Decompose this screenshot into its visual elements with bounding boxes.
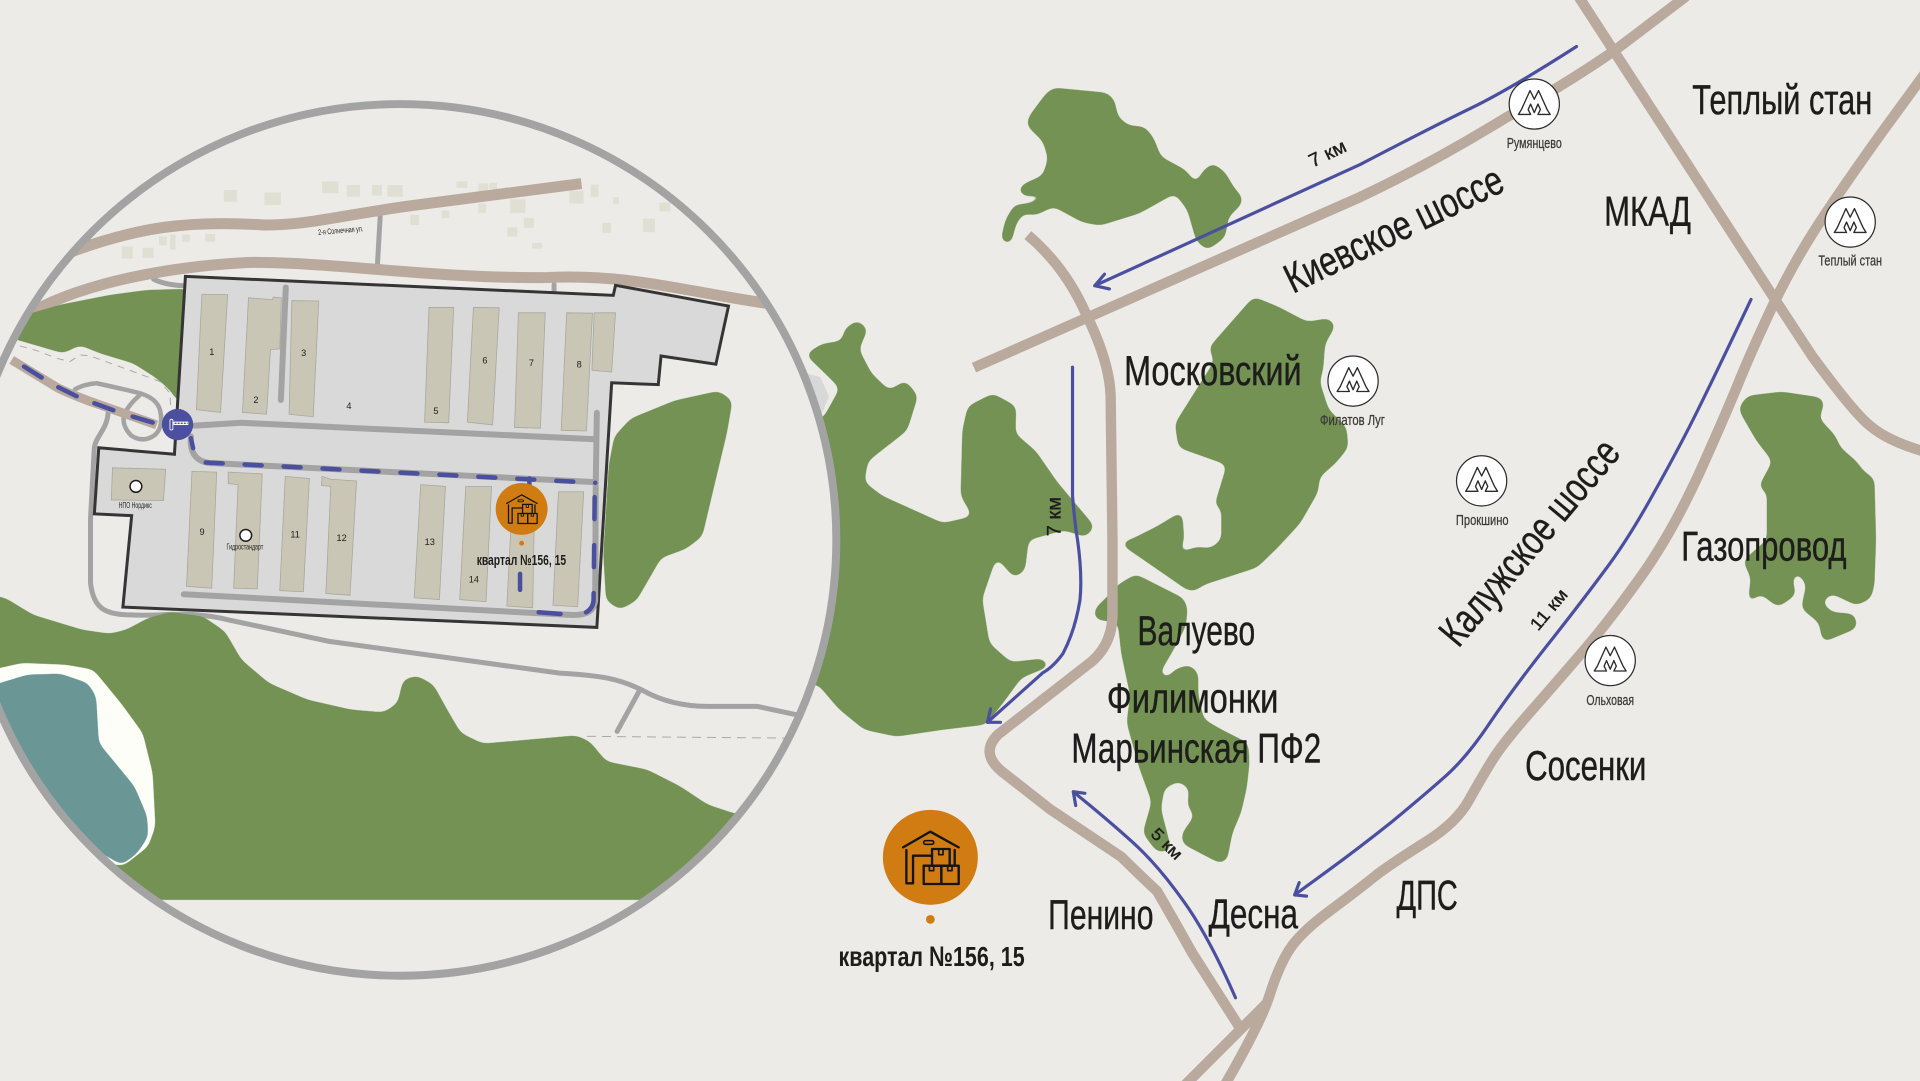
forest: inset east <box>603 391 732 610</box>
forest: big west patch <box>771 320 1095 737</box>
routes <box>987 47 1751 998</box>
inset lens map <box>0 178 832 900</box>
building number labels: 13 <box>425 537 435 547</box>
path: dashed trail <box>20 346 171 410</box>
inset warehouse pin <box>477 483 566 569</box>
small houses <box>122 181 670 259</box>
building number labels: 3 <box>301 348 306 358</box>
building number labels: 9 <box>199 527 205 537</box>
metro: Filatov Lug: Филатов Луг <box>1320 413 1385 429</box>
tenant marker: Gidrostandart: Гидростандарт <box>227 543 264 552</box>
building number labels: 12 <box>337 533 347 543</box>
route: dashed inside site <box>206 462 595 483</box>
pin circle <box>883 810 978 905</box>
gate marker <box>162 409 193 440</box>
building number labels: 1 <box>209 347 214 357</box>
forest: Gazoprovod patch <box>1739 392 1876 642</box>
label: Penino: Пенино <box>1048 891 1153 938</box>
road: grey perimeter road <box>91 413 801 716</box>
road: dashed path south <box>587 736 790 738</box>
metro: Rumyantsevo <box>1507 79 1562 152</box>
metro: Teply Stan <box>1818 197 1882 270</box>
forest: Valuevo patch <box>1095 574 1249 863</box>
pond water <box>0 674 148 865</box>
street label: 2-я Солнечная ул. <box>318 224 364 237</box>
route arrow: 11 km <box>1295 299 1751 896</box>
forest: Moskovsky patch <box>1120 297 1348 591</box>
label: Valuevo: Валуево <box>1138 607 1255 654</box>
inset warehouse pin: квартал №156, 15 <box>477 553 566 569</box>
road: grey connector <box>154 217 554 294</box>
road: Kaluga highway <box>1226 73 1920 1081</box>
road: junction ramp <box>1185 1004 1266 1081</box>
route: dashed east side <box>536 494 597 616</box>
label: DPS: ДПС <box>1397 872 1458 919</box>
distance: 7 km west: 7 км <box>1044 497 1065 536</box>
industrial site <box>94 276 729 627</box>
site lanes <box>184 287 597 615</box>
building number labels: 5 <box>433 406 438 416</box>
label: Moskovsky: Московский <box>1124 347 1302 394</box>
label: Kaluga highway: Калужское шоссе <box>1429 429 1629 655</box>
building number labels: 11 <box>290 529 300 539</box>
inset roads <box>16 184 801 738</box>
building number labels: 2 <box>253 395 258 405</box>
metro: Olkhovaya <box>1585 636 1635 709</box>
roads: main map <box>974 0 1920 1081</box>
building number labels: 4 <box>346 401 352 411</box>
building number labels: 7 <box>529 358 534 368</box>
grey patch beside lens <box>802 372 829 424</box>
warehouse pin <box>839 810 1025 972</box>
pin label: квартал №156, 15 <box>839 941 1025 972</box>
forest: inset bottom <box>0 596 735 900</box>
route arrow: west 7 km <box>987 367 1081 722</box>
icon: warehouse <box>903 832 959 884</box>
route: entry segment <box>191 438 529 590</box>
route arrow: Kiev 7 km <box>1095 47 1577 289</box>
label: Sosenki: Сосенки <box>1525 742 1646 789</box>
lens disc <box>771 384 832 685</box>
metro: Olkhovaya: Ольховая <box>1586 693 1634 709</box>
road: Kiev highway <box>974 0 1686 368</box>
building number labels <box>199 347 582 585</box>
metro: Teply Stan: Теплый стан <box>1818 254 1882 270</box>
route: dashed approach <box>24 367 153 423</box>
label: Desna: Десна <box>1209 890 1299 937</box>
road: approach loop <box>75 383 161 439</box>
distance: 7 km Kiev: 7 км <box>1306 136 1350 172</box>
label: Marinskaya PF2: Марьинская ПФ2 <box>1071 724 1321 771</box>
forest: north patch <box>1001 88 1243 250</box>
route arrow: 5 km <box>1073 792 1236 998</box>
metro: Prokshino: Прокшино <box>1456 513 1509 529</box>
building number labels: 6 <box>482 356 487 366</box>
road: grey branch <box>617 691 639 731</box>
building number labels: 8 <box>577 359 582 369</box>
metro: Prokshino <box>1456 456 1509 529</box>
road: MKAD <box>1578 0 1920 452</box>
road: upper beige road <box>16 262 768 322</box>
label: Kiev highway: Киевское шоссе <box>1276 156 1511 302</box>
site boundary <box>94 276 729 627</box>
label: Filimonki: Филимонки <box>1107 675 1278 722</box>
road: beige approach <box>12 360 157 425</box>
distance: 11 km: 11 км <box>1526 585 1572 634</box>
approach road and loop <box>12 346 171 439</box>
forest: inset north-west <box>18 288 184 398</box>
buildings <box>111 294 615 608</box>
label: MKAD: МКАД <box>1604 187 1691 234</box>
tenant marker: NPO Nordiks: НПО Нордикс <box>119 501 152 510</box>
distance: 5 km: 5 км <box>1147 824 1187 864</box>
forest: main area patches <box>771 88 1876 863</box>
road: west road <box>990 235 1241 1030</box>
label: Gazoprovod: Газопровод <box>1681 523 1847 570</box>
pond bank <box>0 663 155 866</box>
pin dot <box>926 915 935 924</box>
road: Solnechnaya street <box>60 184 581 256</box>
metro: Rumyantsevo: Румянцево <box>1507 136 1562 152</box>
tenant marker: NPO Nordiks <box>119 481 152 510</box>
building number labels: 14 <box>469 575 479 585</box>
metro: Filatov Lug <box>1320 356 1385 429</box>
tenant marker: Gidrostandart <box>227 529 264 552</box>
lens ring <box>0 104 836 976</box>
